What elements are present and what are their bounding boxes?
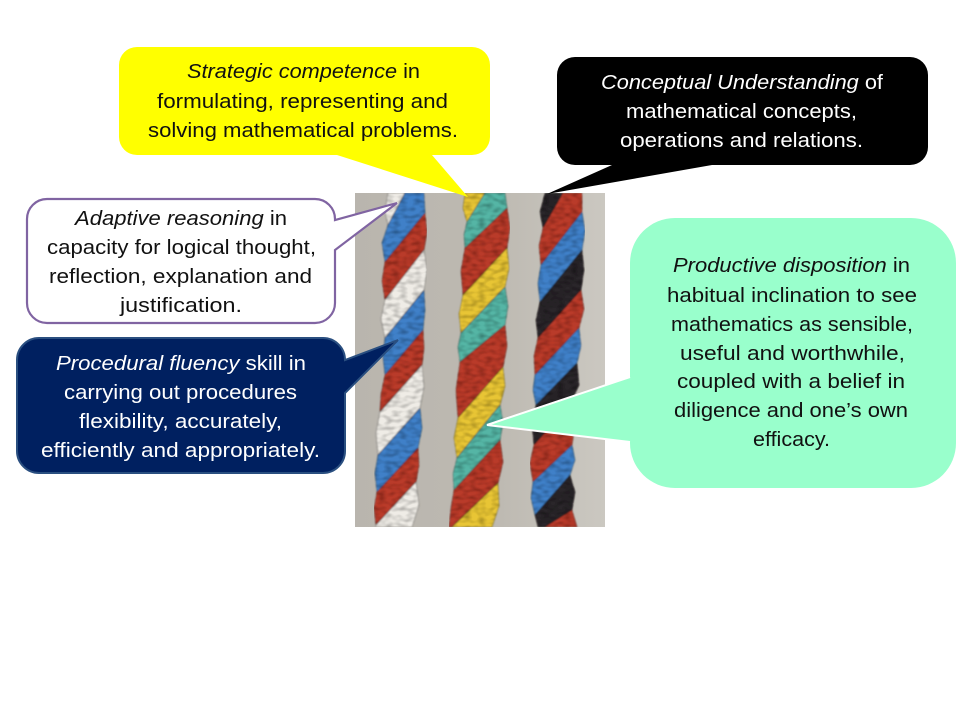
callout: conceptual understanding <box>547 57 928 194</box>
callout: productive disposition: efficacy. <box>753 429 830 451</box>
callout: productive disposition: mathematics as sensible, <box>671 314 913 336</box>
callout: procedural fluency: flexibility, accurately, <box>79 411 282 433</box>
callout: productive disposition <box>487 218 956 488</box>
callout: adaptive reasoning: reflection, explanation and <box>49 266 312 288</box>
callout: conceptual understanding: operations and relations. <box>620 130 863 152</box>
callout: productive disposition: coupled with a belief in <box>677 371 905 393</box>
callout: adaptive reasoning: capacity for logical thought, <box>47 237 316 259</box>
rope 3: black, red, blue <box>530 193 585 527</box>
callout: strategic competence <box>119 47 490 197</box>
callout: procedural fluency: efficiently and appropriately. <box>41 440 320 462</box>
callout: adaptive reasoning: justification. <box>119 295 242 317</box>
callout: productive disposition: useful and worthwhile, <box>680 343 905 365</box>
callout: conceptual understanding: mathematical concepts, <box>626 101 857 123</box>
callout: procedural fluency <box>17 338 398 473</box>
callout: productive disposition: diligence and one’s own <box>674 400 908 422</box>
callout: strategic competence: solving mathematical problems. <box>148 120 458 142</box>
rope 1: white, blue, red <box>374 193 427 527</box>
photo: three braided ropes <box>355 193 605 527</box>
callout: conceptual understanding: Conceptual Understanding of <box>601 72 883 94</box>
callout: strategic competence: formulating, representing and <box>157 91 448 113</box>
callout: productive disposition: Productive disposition in <box>673 255 910 277</box>
callout: productive disposition: habitual inclination to see <box>667 285 917 307</box>
callout: adaptive reasoning <box>27 199 397 323</box>
callout: adaptive reasoning: Adaptive reasoning in <box>74 208 287 230</box>
callout: strategic competence: Strategic competence in <box>187 61 420 83</box>
callout: procedural fluency: Procedural fluency skill in <box>56 353 306 375</box>
rope 2: yellow, teal, red <box>449 193 510 527</box>
callout: procedural fluency: carrying out procedures <box>64 382 297 404</box>
